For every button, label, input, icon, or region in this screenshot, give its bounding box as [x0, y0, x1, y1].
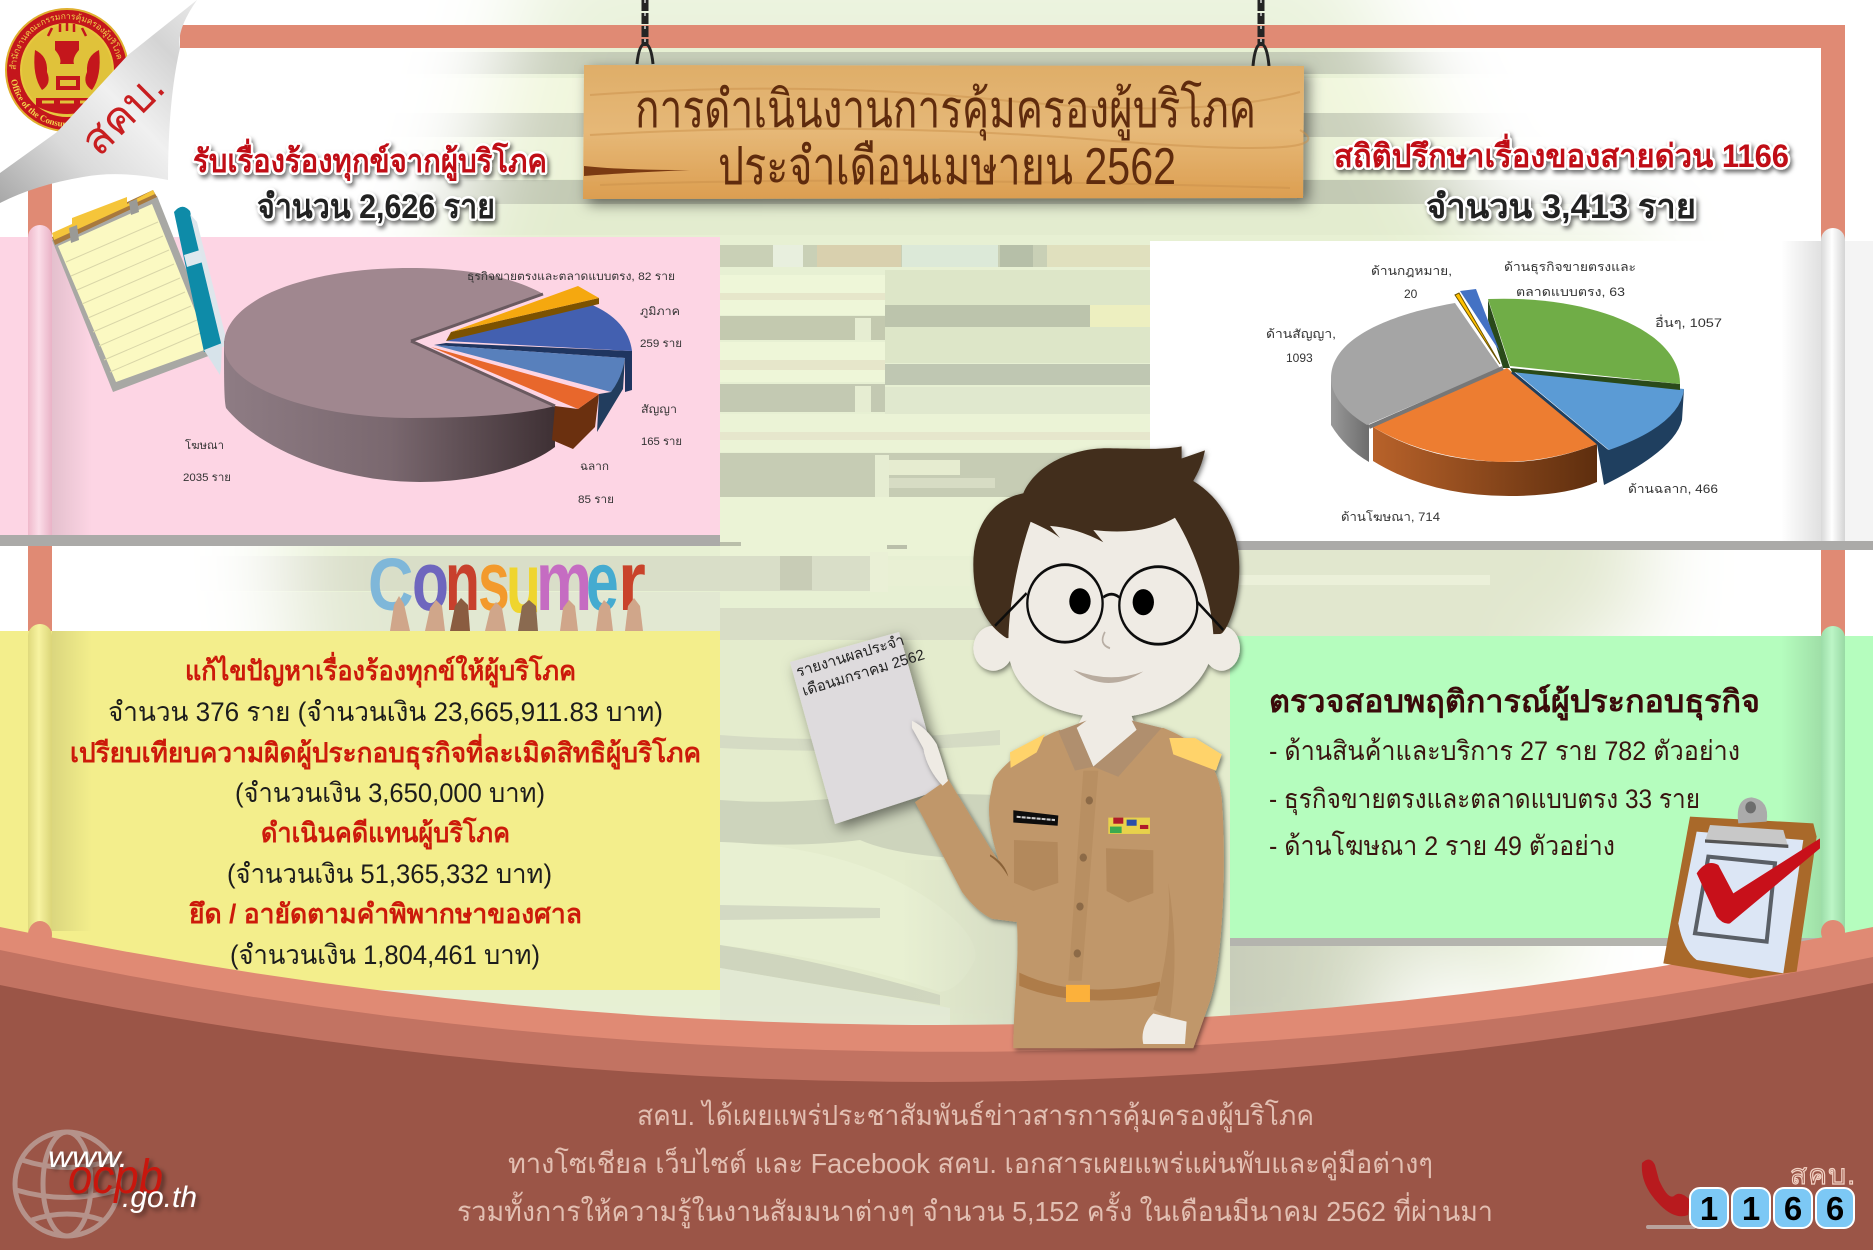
- website text: [48, 1141, 197, 1214]
- consumer word art with hands: [368, 533, 646, 631]
- text: green panel inspection: - ด้านสินค้าและบริการ 27 ราย 782 ตัวอย่าง: [1269, 736, 1740, 766]
- grey rule right: [1150, 541, 1873, 550]
- slice side: regional: [434, 343, 632, 392]
- report sheet: เดือนมกราคม 2562: [800, 646, 927, 700]
- slice: regional 259: [446, 304, 632, 351]
- slice side: other: [1488, 300, 1680, 390]
- pie labels: 259 ราย: [640, 338, 682, 350]
- website text: .go.th: [122, 1181, 197, 1214]
- icon: phone: [1642, 1159, 1690, 1216]
- pie labels: ด้านฉลาก, 466: [1628, 482, 1718, 496]
- slice: direct selling 82: [451, 286, 599, 332]
- icon: notepad and pen: [52, 190, 228, 392]
- roller nubs: [28, 920, 1845, 949]
- text: yellow panel results: (จำนวนเงิน 51,365,332 บาท): [227, 859, 552, 889]
- pie labels: ด้านโฆษณา, 714: [1341, 510, 1440, 524]
- fold label: สคบ.: [71, 62, 174, 165]
- slice: direct selling 63: [1460, 289, 1500, 352]
- slice: label 466: [1514, 371, 1684, 450]
- text: yellow panel results: ยึด / อายัดตามคำพิพากษาของศาล: [189, 899, 582, 929]
- letters: C: [368, 543, 413, 626]
- text: green panel inspection: [1269, 684, 1760, 861]
- slice: advertising 2035: [224, 268, 555, 418]
- text: footer: [457, 1099, 1493, 1229]
- panel: green business inspection: [1230, 626, 1873, 938]
- hotline 1166 badge: 6: [1826, 1190, 1844, 1227]
- hotline 1166 badge: 1: [1700, 1190, 1718, 1227]
- logo seal: [5, 8, 128, 132]
- frame left bar: [28, 170, 52, 940]
- heading hotline: สถิติปรึกษาเรื่องของสายด่วน 1166: [1334, 133, 1789, 174]
- pie labels: 20: [1404, 287, 1418, 301]
- wooden title sign: [583, 65, 1308, 199]
- footer brown: [0, 983, 1873, 1250]
- text: yellow panel results: (จำนวนเงิน 3,650,000 บาท): [235, 778, 545, 808]
- panel: hotline white: [1150, 228, 1873, 541]
- roller pink: [28, 225, 52, 535]
- pie labels: ภูมิภาค: [640, 306, 680, 318]
- brand label: สคบ.: [1790, 1159, 1855, 1190]
- pie labels: สัญญา: [641, 404, 677, 416]
- logo seal: Office of the Consumer: [12, 80, 66, 127]
- text: yellow panel results: จำนวน 376 ราย (จำนวนเงิน 23,665,911.83 บาท): [108, 697, 663, 727]
- hotline 1166 badge: 1: [1742, 1190, 1760, 1227]
- number tiles: [1690, 1188, 1854, 1228]
- roller yellow: [28, 624, 52, 935]
- panel: complaints pink: [0, 225, 720, 535]
- wooden title sign: ประจำเดือนเมษายน 2562: [718, 138, 1176, 196]
- hotline 1166 badge: [1642, 1159, 1855, 1229]
- text: footer: รวมทั้งการให้ความรู้ในงานสัมมนาต่างๆ จำนวน 5,152 ครั้ง ในเดือนมีนาคม 2562 ที่ผ่านมา: [457, 1191, 1493, 1229]
- hotline 1166 badge: 6: [1784, 1190, 1802, 1227]
- character: officer holding report: [790, 446, 1240, 1048]
- slice side: advertising: [224, 341, 555, 482]
- slice: advertising 714: [1373, 368, 1597, 462]
- slice side: contract: [597, 358, 625, 432]
- side: advertising: [1373, 427, 1597, 496]
- text: green panel inspection: - ธุรกิจขายตรงและตลาดแบบตรง 33 ราย: [1269, 784, 1700, 816]
- report text: รายงานผลประจำ: [794, 632, 906, 681]
- text: yellow panel results: เปรียบเทียบความผิดผู้ประกอบธุรกิจที่ละเมิดสิทธิผู้บริโภค: [70, 733, 701, 770]
- letters: [368, 533, 646, 631]
- background photo of building: [245, 0, 1680, 1025]
- curved band mid: [0, 950, 1873, 1250]
- frame right bar: [1821, 25, 1845, 930]
- slice: other 1057: [1488, 299, 1680, 384]
- letters: r: [618, 533, 646, 628]
- heading hotline: [1334, 133, 1789, 226]
- slice: contract 165: [434, 345, 625, 392]
- pie labels: ด้านธุรกิจขายตรงและ: [1504, 260, 1636, 275]
- letters: u: [506, 537, 541, 631]
- pie labels: ด้านสัญญา,: [1266, 327, 1336, 341]
- website text: www.: [48, 1141, 128, 1174]
- roller white: [1821, 228, 1845, 541]
- grey rule left: [0, 535, 720, 546]
- chart: complaints pie: [183, 268, 682, 506]
- pie labels: อื่นๆ, 1057: [1655, 314, 1722, 330]
- divider blue edge: [1512, 372, 1606, 450]
- text: yellow panel results: (จำนวนเงิน 1,804,461 บาท): [230, 940, 540, 970]
- pie labels: ฉลาก: [580, 461, 609, 473]
- letters: o: [412, 534, 449, 628]
- slice: law 20: [1455, 293, 1500, 364]
- letters: n: [445, 535, 480, 629]
- heading complaints: จำนวน 2,626 ราย: [257, 188, 495, 226]
- text: green panel inspection: ตรวจสอบพฤติการณ์ผู้ประกอบธุรกิจ: [1269, 684, 1760, 721]
- heading hotline: จำนวน 3,413 ราย: [1426, 188, 1696, 226]
- logo seal: สำนักงานคณะกรรมการคุ้มครองผู้บริโภค: [9, 13, 122, 70]
- pie labels: [1266, 260, 1722, 524]
- text: footer: สคบ. ได้เผยแพร่ประชาสัมพันธ์ข่าวสารการคุ้มครองผู้บริโภค: [637, 1099, 1314, 1133]
- officer figure: [912, 446, 1240, 1048]
- pie labels: 2035 ราย: [183, 472, 231, 484]
- title text: การดำเนินงานการคุ้มครองผู้บริโภค: [635, 80, 1256, 141]
- letters: e: [586, 535, 619, 629]
- letters: s: [478, 535, 510, 629]
- frame top bar: [180, 25, 1845, 48]
- pie labels: 165 ราย: [641, 436, 682, 448]
- panel: yellow results: [0, 624, 720, 990]
- pie labels: 85 ราย: [578, 494, 614, 506]
- side: label: [1597, 389, 1684, 485]
- icon: clipboard with check: [1663, 797, 1820, 978]
- text: footer: ทางโซเชียล เว็บไซต์ และ Facebook สคบ. เอกสารเผยแพร่แผ่นพับและคู่มือต่างๆ: [508, 1146, 1433, 1181]
- text: yellow panel results: [70, 651, 701, 970]
- slice: label 85: [431, 347, 599, 409]
- text: yellow panel results: ดำเนินคดีแทนผู้บริโภค: [261, 816, 510, 850]
- text: yellow panel results: แก้ไขปัญหาเรื่องร้องทุกข์ให้ผู้บริโภค: [185, 651, 576, 688]
- icon: globe and website: [15, 1132, 197, 1236]
- hands: [390, 596, 643, 631]
- heading complaints: [193, 138, 547, 226]
- phone shadow: [1646, 1225, 1696, 1229]
- chains: [637, 0, 1269, 66]
- divider grey/orange: [1369, 368, 1503, 427]
- heading complaints: รับเรื่องร้องทุกข์จากผู้บริโภค: [193, 138, 547, 182]
- report sheet: [790, 632, 943, 824]
- roller green: [1821, 626, 1845, 938]
- pen: [174, 207, 222, 352]
- curved band light: [0, 927, 1873, 1250]
- chart: hotline pie: [1266, 260, 1722, 524]
- slice side: label: [552, 394, 599, 449]
- grey rule green bottom: [1230, 938, 1873, 946]
- notch walls: [411, 294, 555, 406]
- page corner fold: [0, 0, 197, 203]
- slice: contract 1093: [1331, 303, 1500, 425]
- side: contract: [1331, 378, 1369, 462]
- pie labels: [183, 271, 682, 506]
- pie labels: ด้านกฎหมาย,: [1371, 264, 1452, 278]
- pie labels: 1093: [1286, 351, 1313, 365]
- website text: ocpb: [68, 1151, 163, 1204]
- pie labels: ตลาดแบบตรง, 63: [1516, 285, 1625, 299]
- pie labels: ธุรกิจขายตรงและตลาดแบบตรง, 82 ราย: [467, 271, 675, 283]
- text: green panel inspection: - ด้านโฆษณา 2 ราย 49 ตัวอย่าง: [1269, 831, 1615, 861]
- slice side: direct selling: [446, 298, 599, 341]
- letters: m: [536, 534, 592, 628]
- pie labels: โฆษณา: [185, 438, 224, 452]
